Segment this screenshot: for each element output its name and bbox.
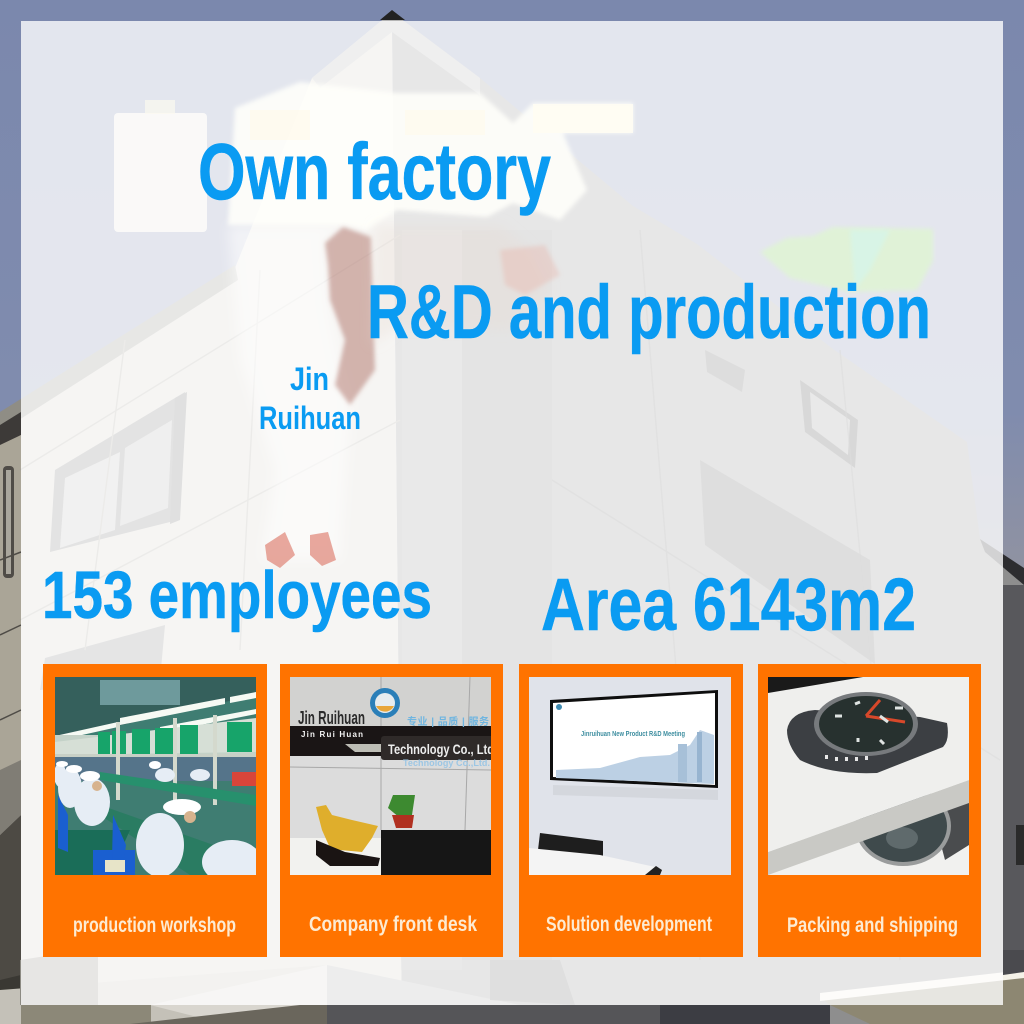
left strip of neighbouring building <box>0 435 21 780</box>
decorative pale bird shape behind the titles <box>114 82 933 568</box>
photo: meeting room screen: Jinruihuan New Product R&D Meeting <box>581 731 685 738</box>
panel: production workshop <box>43 664 267 957</box>
photo: reception desk: Jin Ruihuan <box>298 708 365 728</box>
photo: assembly line workers <box>54 677 262 884</box>
brand name: Jin Ruihuan: Ruihuan <box>259 400 361 436</box>
label: Company front desk <box>309 913 477 936</box>
panel: solution development <box>519 664 743 957</box>
stat: Area 6143m2: Area 6143m2 <box>541 563 916 646</box>
title: Own factory: Own factory <box>198 127 551 216</box>
photo: reception desk: Technology Co.,Ltd. <box>403 758 490 768</box>
brand name: Jin Ruihuan: Jin <box>290 361 329 397</box>
photo: reception desk: 专业 | 品质 | 服务 <box>407 715 489 728</box>
brand name: Jin Ruihuan <box>259 361 361 436</box>
label: Packing and shipping <box>787 914 958 937</box>
photo: reception desk: Jin Rui Huan <box>301 730 363 739</box>
stat: 153 employees: 153 employees <box>42 558 432 633</box>
label: Solution development <box>546 913 712 936</box>
photo: meeting room screen <box>529 677 731 875</box>
windows on left face <box>50 392 185 552</box>
label: production workshop <box>73 914 236 937</box>
windows on right face <box>465 343 535 432</box>
panel: company front desk <box>280 664 503 957</box>
photo: reception desk: Technology Co., Ltd <box>388 741 494 757</box>
photo: reception desk <box>290 677 494 875</box>
photo: smartwatch box <box>768 677 969 875</box>
lower ledge <box>0 965 327 1024</box>
panel: packing and shipping <box>758 664 981 957</box>
